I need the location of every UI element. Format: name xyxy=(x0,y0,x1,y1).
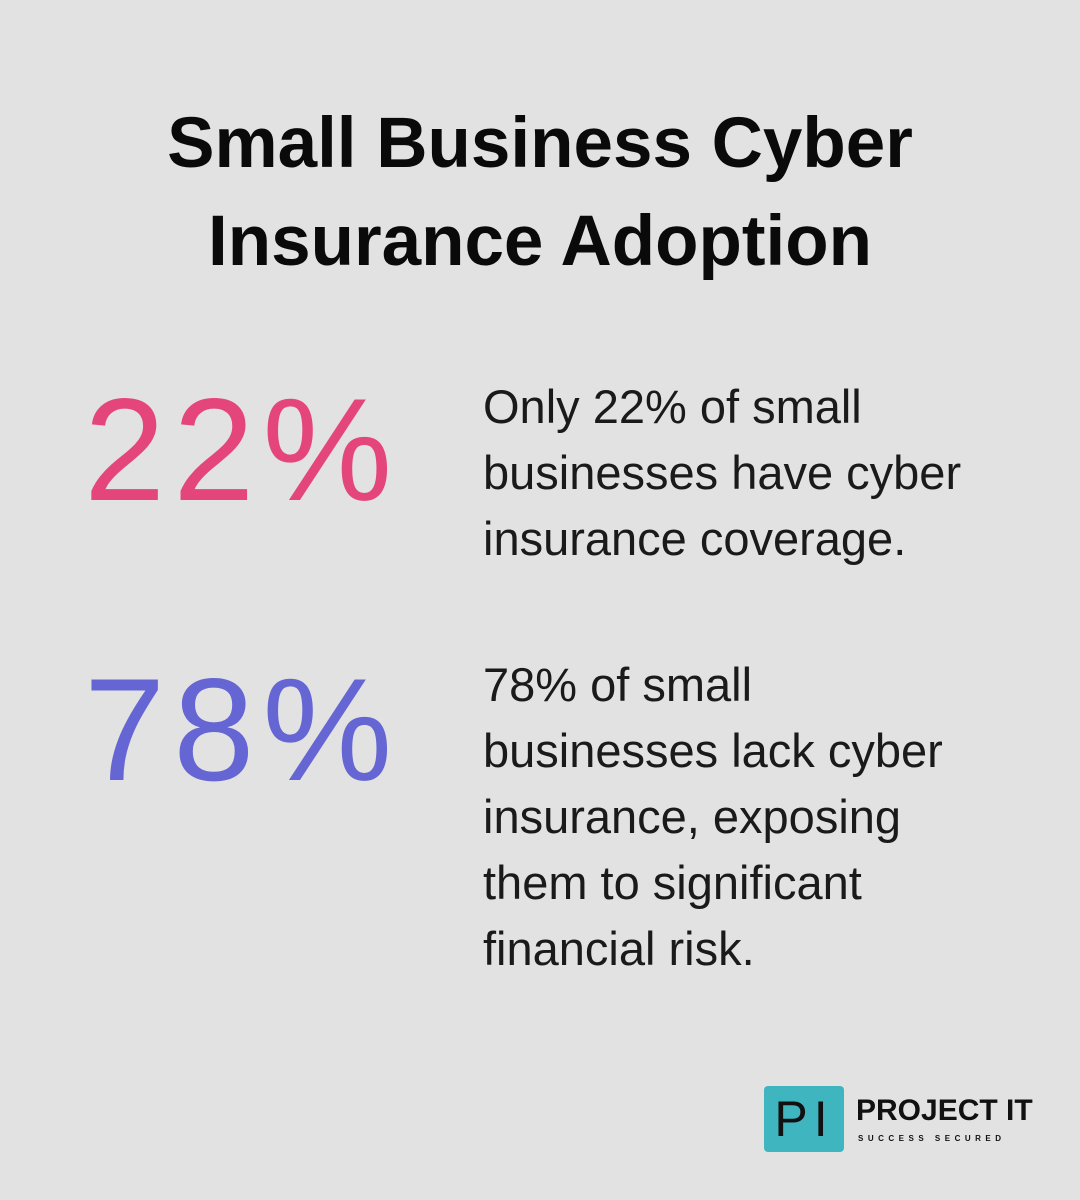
stat: 78%: 78% xyxy=(84,648,400,811)
text: 22% description: Only 22% of small xyxy=(483,380,862,433)
stat: 22%: 22% xyxy=(84,368,400,531)
text: 78% description: them to significant xyxy=(483,856,862,909)
text: 78% description: businesses lack cyber xyxy=(483,724,943,777)
title xyxy=(167,104,913,281)
text: 22% description: businesses have cyber xyxy=(483,446,961,499)
logo xyxy=(764,1086,1033,1152)
tagline: SUCCESS SECURED xyxy=(858,1134,1006,1143)
icon: PI box xyxy=(764,1086,844,1152)
text: 78% description xyxy=(483,658,943,975)
text: 78% description: financial risk. xyxy=(483,922,755,975)
text: 78% description: insurance, exposing xyxy=(483,790,901,843)
title: Small Business Cyber xyxy=(167,104,913,183)
logo text: PROJECT IT xyxy=(856,1094,1033,1127)
icon: PI box: PI xyxy=(774,1091,834,1147)
text: 78% description: 78% of small xyxy=(483,658,752,711)
title: Insurance Adoption xyxy=(208,202,872,281)
text: 22% description xyxy=(483,380,961,565)
text: 22% description: insurance coverage. xyxy=(483,512,906,565)
